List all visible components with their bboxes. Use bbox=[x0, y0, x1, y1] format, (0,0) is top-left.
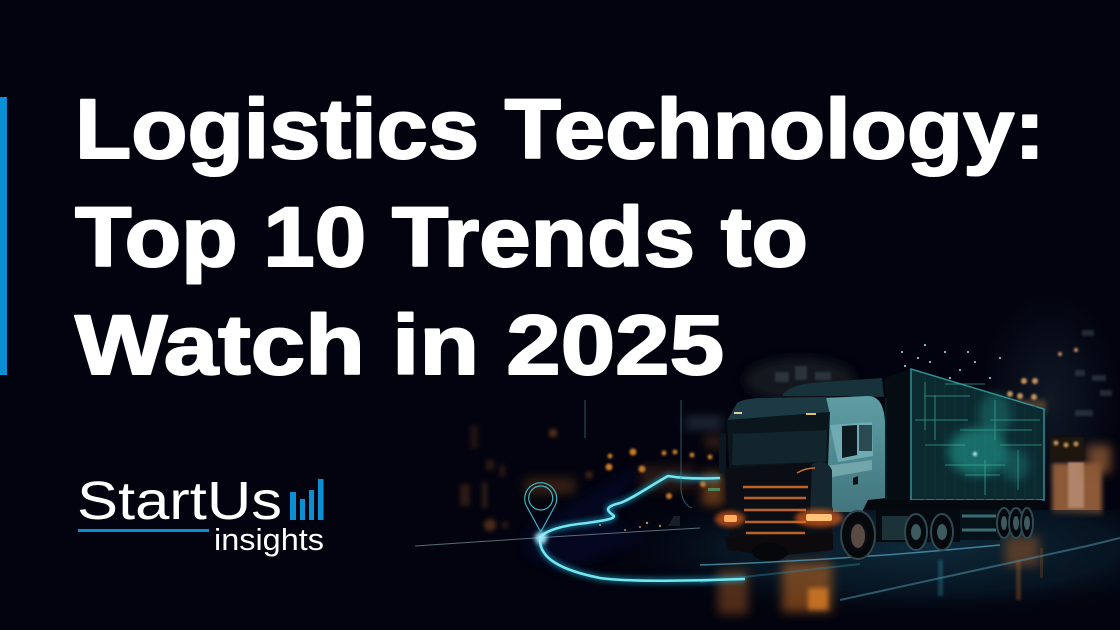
truck bbox=[715, 344, 1044, 561]
truck: cab front bbox=[715, 397, 843, 556]
truck: particle spray bbox=[901, 344, 1001, 379]
accent bar bbox=[0, 97, 7, 375]
title: Watch in 2025 bbox=[75, 298, 724, 392]
background city lights bbox=[460, 290, 1120, 570]
truck: cab side bbox=[783, 378, 887, 512]
logo bar chart icon bbox=[290, 479, 324, 520]
title: Top 10 Trends to bbox=[75, 190, 808, 284]
road surface bbox=[590, 510, 1120, 630]
logo: StartUs insights: insights bbox=[214, 522, 324, 557]
title: Logistics Technology: bbox=[75, 82, 1045, 176]
truck: chassis and rear wheels bbox=[870, 500, 1042, 550]
logo: StartUs insights: StartUs bbox=[77, 471, 282, 531]
truck: front wheels bbox=[752, 511, 875, 561]
title bbox=[75, 82, 1045, 392]
route line with location pin bbox=[415, 400, 745, 581]
truck: trailer container bbox=[885, 369, 1044, 500]
logo: StartUs insights bbox=[77, 471, 324, 557]
